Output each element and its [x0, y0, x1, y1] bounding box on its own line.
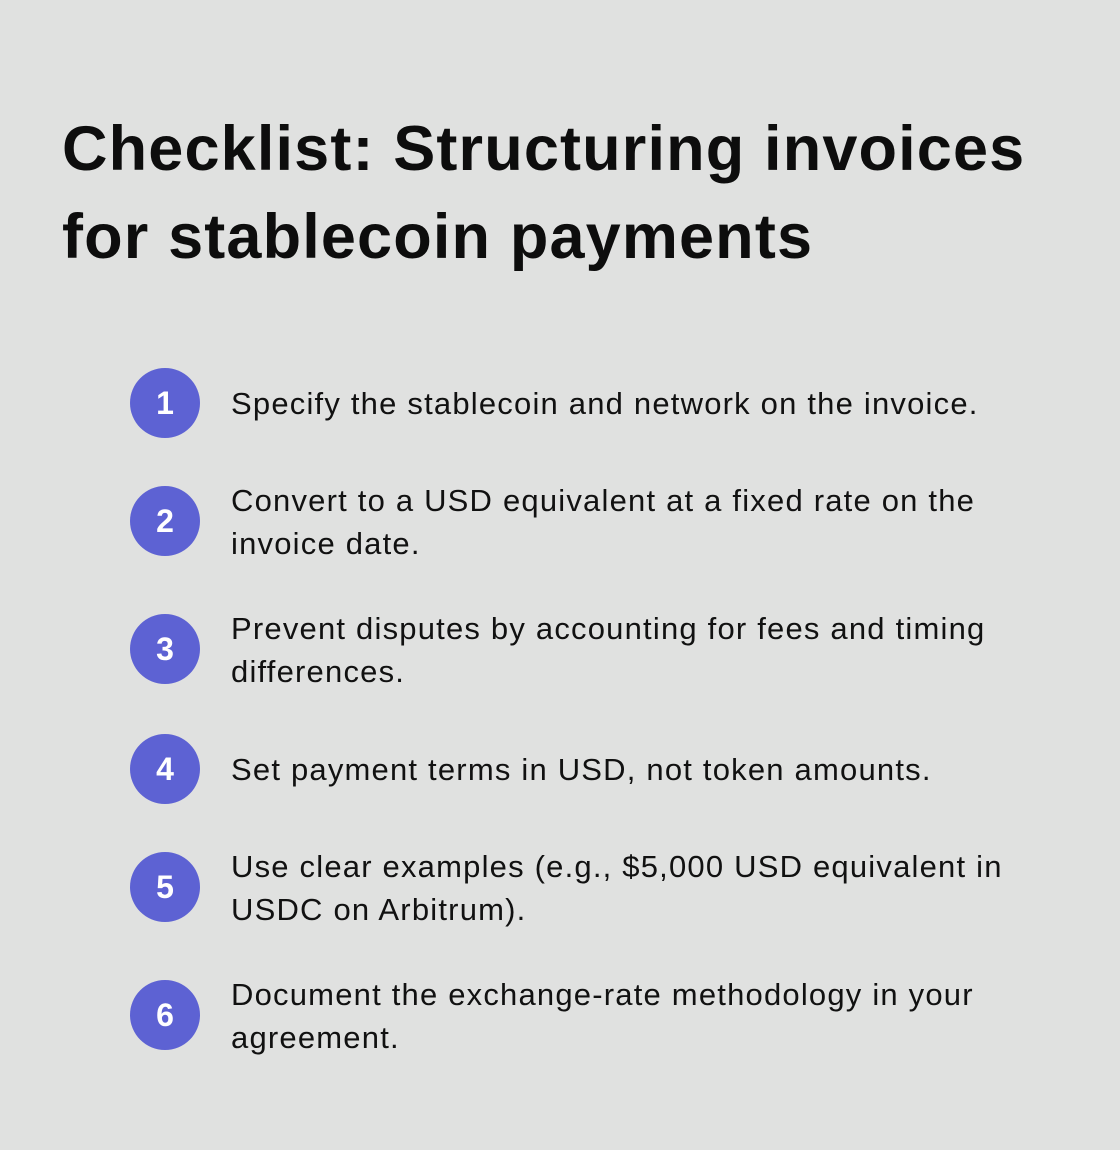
item 2 [130, 483, 975, 561]
title: Checklist: Structuring invoices [62, 114, 1025, 184]
item 5: Use clear examples (e.g., $5,000 USD equivalent in [231, 849, 1003, 884]
item 2: invoice date. [231, 526, 421, 561]
item 6 [130, 977, 974, 1055]
item 4: Set payment terms in USD, not token amounts. [231, 752, 932, 787]
item 5: 5 [156, 869, 174, 905]
item 1: Specify the stablecoin and network on the invoice. [231, 386, 979, 421]
item 4: 4 [156, 751, 174, 787]
item 3: differences. [231, 654, 405, 689]
item 5: USDC on Arbitrum). [231, 892, 526, 927]
title [62, 114, 1025, 272]
title: for stablecoin payments [62, 202, 813, 272]
item 3: Prevent disputes by accounting for fees and timing [231, 611, 985, 646]
item 5 [130, 849, 1003, 927]
item 3 [130, 611, 985, 689]
item 1: 1 [156, 385, 174, 421]
item 2: Convert to a USD equivalent at a fixed rate on the [231, 483, 975, 518]
item 4 [130, 734, 932, 804]
item 1 [130, 368, 979, 438]
item 2: 2 [156, 503, 174, 539]
item 6: 6 [156, 997, 174, 1033]
item 3: 3 [156, 631, 174, 667]
item 6: Document the exchange-rate methodology in your [231, 977, 974, 1012]
item 6: agreement. [231, 1020, 400, 1055]
